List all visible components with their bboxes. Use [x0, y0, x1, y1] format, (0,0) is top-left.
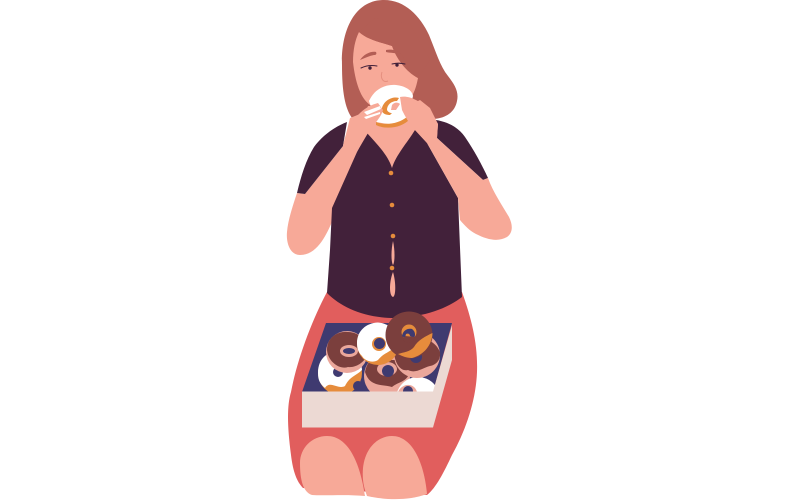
donut right: [394, 338, 440, 378]
donuts: [318, 312, 440, 392]
shirt: [297, 120, 488, 318]
donut white top: [357, 322, 399, 365]
eyes: [361, 63, 405, 69]
donut bottom right white: [397, 378, 435, 392]
held donut: [369, 85, 413, 128]
neck and chest: [352, 106, 428, 172]
illustration: woman eating donuts: [286, 0, 512, 500]
knees: [300, 436, 427, 499]
donut center: [364, 357, 410, 392]
donut top chocolate: [386, 312, 432, 358]
donut left brown: [326, 331, 368, 373]
nose: [381, 72, 388, 81]
donut box back: [302, 323, 452, 392]
hair fringe: [359, 18, 430, 78]
skirt: [288, 292, 477, 495]
face: [353, 32, 418, 106]
shirt gaps and buttons: [389, 171, 395, 297]
left arm: [287, 108, 375, 255]
fingers: [343, 97, 438, 150]
hair back: [342, 0, 458, 119]
right arm: [410, 100, 512, 240]
eyebrows: [360, 50, 402, 60]
donut bottom left white: [318, 354, 362, 392]
donut box front: [302, 325, 452, 428]
